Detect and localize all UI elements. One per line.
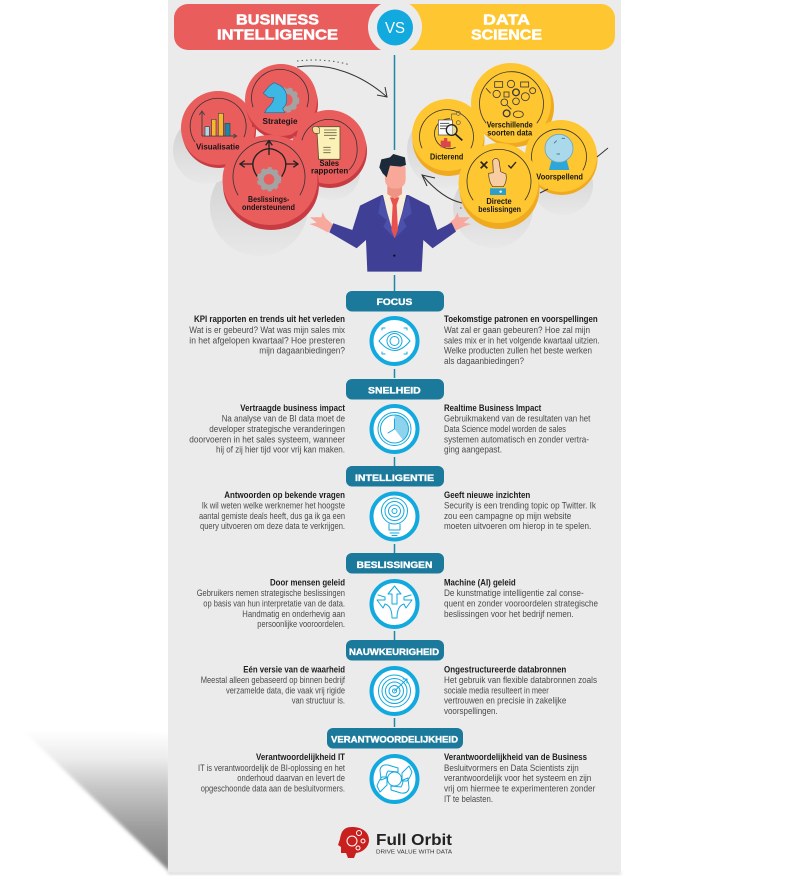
section: verantwoordelijkheid [198,728,595,804]
decorative triangles between bubbles [252,121,298,137]
label pill [346,640,444,660]
heading: data science: DATA [483,12,531,28]
text: ds verantwoordelijkheid: Besluitvormers en Data Scientists zijn [444,763,579,773]
text: ds focus: Wat zal er gaan gebeuren? Hoe zal mijn [444,325,590,335]
tie [390,197,399,238]
bubble: dicterend [412,99,484,176]
text: bi verantwoordelijkheid: onderhoud daarvan en levert de [237,773,345,783]
tagline: DRIVE VALUE WITH DATA [376,850,452,856]
lapels [378,195,412,238]
label pill [346,291,444,312]
icon: eye [372,318,418,364]
text: ds focus: Welke producten zullen het beste werken [444,346,592,356]
bubble: beslissingsondersteunend [222,135,319,230]
text: ds focus: sales mix er in het volgende kwartaal uitzien. [444,335,600,345]
text: ds focus: Toekomstige patronen en voorspellingen [444,314,598,324]
text: ds beslissingen: quent en zonder vooroordelen strategische [444,598,598,608]
text: bi snelheid: Na analyse van de BI data moet de [222,414,345,424]
icon: report scroll [313,126,340,159]
text: ds intelligentie: Security is een trending topic op Twitter. Ik [444,500,597,510]
center timeline lines [394,55,396,727]
face [385,161,406,189]
suit [329,195,456,272]
section: focus [189,291,600,366]
text: bi beslissingen: Door mensen geleid [270,578,345,588]
red bubble labels: Strategie [262,117,298,126]
text: bi focus: in het afgelopen kwartaal? Hoe presteren [189,335,345,345]
text: bi intelligentie: aantal gemiste deals heeft, dus ga ik ga een [199,511,345,521]
text: ds nauwkeurigheid [444,664,598,716]
bubble: verschillende soorten data [471,63,554,147]
text: ds intelligentie: Geeft nieuwe inzichten [444,490,530,500]
heading: data science [395,4,615,50]
bubble: voorspellend [525,120,598,195]
label pill: NAUWKEURIGHEID [349,647,439,657]
text: bi focus [189,314,346,356]
person with open hands [309,154,471,272]
bubble: directe beslissingen [458,143,540,229]
text: bi verantwoordelijkheid [198,752,346,794]
bubble shadows [407,112,593,248]
yellow bubble labels: Voorspellend [536,172,583,182]
label pill: VERANTWOORDELIJKHEID [331,735,458,745]
text: bi beslissingen: Handmatig en onderhevig aan [242,609,345,619]
heading: business intelligence: BUSINESS [236,12,319,28]
data science bubble cluster [407,63,608,248]
text: ds beslissingen: De kunstmatige intelligentie zal conse- [444,588,584,598]
label pill: SNELHEID [368,385,421,395]
text: ds nauwkeurigheid: sociale media resulteert in meer [444,685,549,695]
vs badge: VS [385,20,405,37]
icon: red head [338,827,369,858]
icon: clock [372,406,418,452]
text: bi verantwoordelijkheid: opgeschoonde data aan de besluitvormers. [201,784,345,794]
text: ds beslissingen: Machine (AI) geleid [444,578,516,588]
icon: pointing hand [481,158,516,195]
text: bi focus: mijn dagaanbiedingen? [259,346,345,356]
text: bi snelheid: doorvoeren in het sales systeem, wanneer [189,434,345,444]
text: bi beslissingen: Gebruikers nemen strategische beslissingen [197,588,345,598]
section: intelligentie [199,466,597,540]
icon: arrows and gear [240,141,298,190]
red bubble labels: Beslissings- [248,195,290,204]
text: ds snelheid: Gebruikmakend van de resultaten van het [444,414,591,424]
text: ds focus: als dagaanbiedingen? [444,356,524,366]
vs badge [368,0,422,54]
icon: chess knight and gear [263,83,298,113]
text: bi snelheid: Vertraagde business impact [240,403,345,413]
text: ds nauwkeurigheid: Het gebruik van flexible databronnen zoals [444,675,598,685]
icon: three way arrows [372,581,418,627]
icon: linked hands [372,756,418,802]
text: bi snelheid [189,403,345,454]
text: ds intelligentie [444,490,597,531]
text: ds nauwkeurigheid: vertrouwen en precisie in zakelijke [444,696,566,706]
label pill: INTELLIGENTIE [355,473,434,483]
text: bi focus: KPI rapporten en trends uit het verleden [194,314,345,324]
text: bi snelheid: developer strategische veranderingen [209,424,345,434]
section: beslissingen [197,553,598,629]
arrow: data science to person [422,148,608,208]
label pill [346,466,444,486]
text: ds snelheid: Data Science model worden de sales [444,424,567,434]
heading: data science: SCIENCE [471,28,542,44]
text: bi beslissingen: persoonlijke vooroordelen. [257,619,345,629]
yellow bubble labels: soorten data [487,128,533,138]
text: ds snelheid: ging aangepast. [444,444,502,454]
neck [387,182,402,199]
text: ds snelheid [444,403,591,454]
text: ds verantwoordelijkheid: verantwoordelijk voor het systeem en zijn [444,773,591,783]
heading: business intelligence: INTELLIGENCE [217,28,338,44]
jacket button [393,254,395,257]
text: ds snelheid: Realtime Business Impact [444,403,541,413]
left hand [309,212,333,233]
red bubble labels: Visualisatie [196,142,240,152]
text: ds beslissingen [444,578,598,619]
text: ds verantwoordelijkheid [444,752,595,804]
icon: crystal ball [545,134,573,170]
wordmark: Full Orbit [376,832,452,849]
yellow bubble labels: beslissingen [478,205,521,214]
text: bi intelligentie: query uitvoeren om deze data te verkrijgen. [200,521,345,531]
yellow bubble labels [430,120,583,214]
section: snelheid [189,379,591,454]
text: bi verantwoordelijkheid: Verantwoordelijkheid IT [256,752,346,762]
text: ds nauwkeurigheid: voorspellingen. [444,706,498,716]
red bubble labels: rapporten [311,166,348,176]
logo: full orbit [338,827,452,858]
text: bi nauwkeurigheid: van structuur is. [292,696,345,706]
red bubble labels [196,117,348,212]
text: bi verantwoordelijkheid: IT is verantwoordelijk de BI-oplossing en het [198,763,345,773]
icon: data type symbols [486,80,536,118]
text: ds focus [444,314,600,366]
label pill [346,379,444,400]
yellow bubble labels: Verschillende [487,120,533,130]
text: bi intelligentie [199,490,345,531]
text: bi nauwkeurigheid: Meestal alleen gebaseerd op binnen bedrijf [201,675,345,685]
icon: brain orbits [347,830,365,850]
red bubble labels: Sales [320,159,339,168]
hair [379,154,406,177]
heading: business intelligence [174,4,400,50]
shirt [383,193,407,238]
bubble: strategie [245,64,318,140]
text: ds intelligentie: zou een campagne op mijn website [444,511,571,521]
text: ds intelligentie: moeten uitvoeren om hierop in te spelen. [444,521,591,531]
text: bi nauwkeurigheid [201,664,345,706]
text: ds snelheid: systemen automatisch en zonder vertra- [444,434,589,444]
text: ds beslissingen: beslissingen voor het bedrijf nemen. [444,609,574,619]
yellow bubble labels: Dicterend [430,152,463,162]
arrow: bi to person [297,60,387,97]
text: bi snelheid: hij of zij hier tijd voor vrij kan maken. [216,444,345,454]
text: bi beslissingen [197,578,345,629]
icon: target [372,668,418,714]
text: ds verantwoordelijkheid: Verantwoordelijkheid van de Business [444,752,587,762]
bubble: visualisatie [181,91,256,168]
label pill: BESLISSINGEN [357,560,432,570]
yellow bubble labels: Directe [486,197,512,206]
text: bi intelligentie: Antwoorden op bekende vragen [224,490,345,500]
business intelligence bubble cluster [173,64,367,256]
text: bi nauwkeurigheid: verzamelde data, die vaak vrij rigide [226,685,345,695]
bubble shadows [173,116,360,256]
text: bi beslissingen: op basis van hun interpretatie van de data. [203,598,345,608]
icon: magnifier over report [435,111,462,149]
poster drop shadow [8,716,621,875]
header banner [174,0,615,54]
text: bi intelligentie: Ik wil weten welke werknemer het hoogste [202,500,345,510]
text: ds verantwoordelijkheid: vrij om hiermee te experimenteren zonder [444,784,595,794]
icon: bar chart [199,111,237,138]
text: bi nauwkeurigheid: Eén versie van de waarheid [243,664,345,674]
label pill [346,553,444,574]
bubble: sales rapporten [292,110,367,188]
section: nauwkeurigheid [201,640,598,716]
label pill: FOCUS [377,297,412,307]
label pill [327,728,463,748]
red bubble labels: ondersteunend [242,203,295,212]
text: ds nauwkeurigheid: Ongestructureerde databronnen [444,664,566,674]
icon: light bulb [372,494,418,540]
right hand [447,212,471,233]
text: bi focus: Wat is er gebeurd? Wat was mijn sales mix [189,325,346,335]
poster panel background [168,0,621,872]
text: ds verantwoordelijkheid: IT te belasten. [444,794,493,804]
